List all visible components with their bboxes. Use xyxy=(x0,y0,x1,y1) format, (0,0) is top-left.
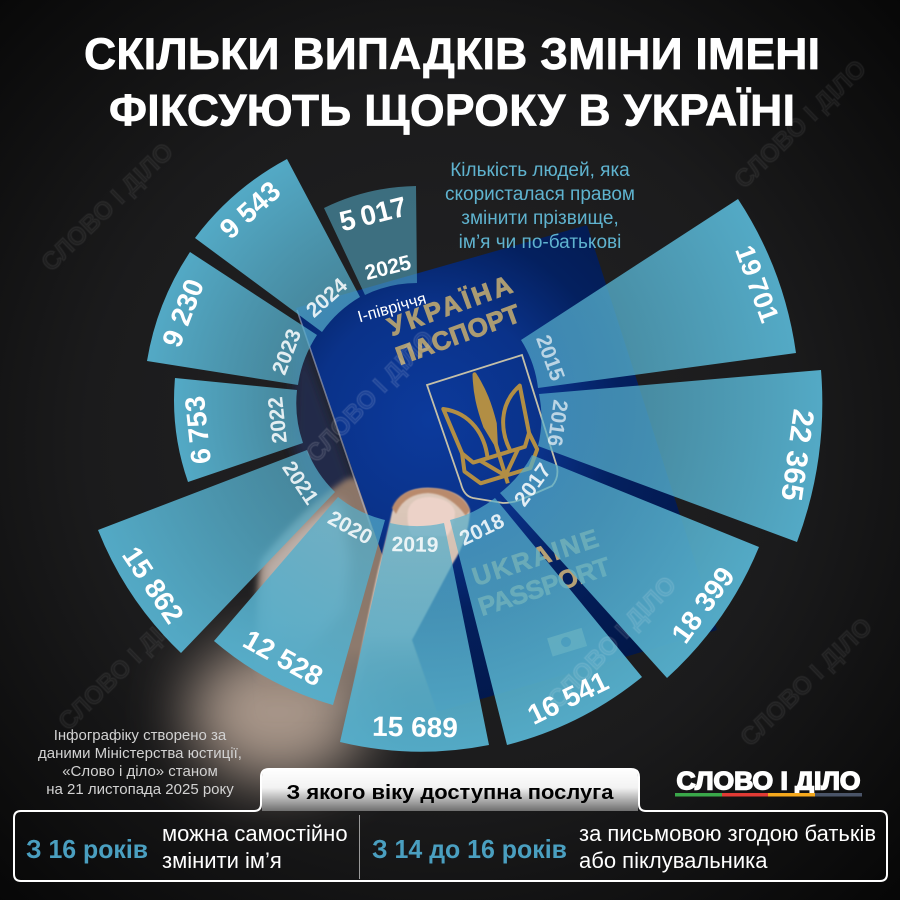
age box xyxy=(14,769,887,881)
wedge 2025 xyxy=(324,186,417,295)
passport cover xyxy=(296,225,717,712)
wedge 2017: 18 399 xyxy=(665,561,741,649)
wedge 2019 xyxy=(340,523,489,752)
tab heading: З якого віку доступна послуга xyxy=(286,782,614,804)
wedge 2021: 15 862 xyxy=(116,541,190,629)
heading: Україна Паспорт: ПАСПОРТ xyxy=(392,298,524,371)
from 14 to 16 years: З 14 до 16 років xyxy=(372,834,567,864)
wedge 2025: 5 017 xyxy=(336,191,410,237)
passport spine line xyxy=(297,310,372,530)
wedge 2024 xyxy=(195,159,360,332)
subtitle xyxy=(445,160,635,253)
wedge 2015 xyxy=(521,199,796,388)
trident xyxy=(436,363,546,495)
divider xyxy=(359,815,360,879)
watermarks: СЛОВО І ДІЛО xyxy=(729,54,872,194)
watermarks: СЛОВО І ДІЛО xyxy=(735,612,878,752)
thumb base shadow xyxy=(392,488,470,516)
title: СКІЛЬКИ ВИПАДКІВ ЗМІНИ ІМЕНІ xyxy=(84,30,820,79)
hand glow xyxy=(188,642,368,782)
source note xyxy=(38,727,242,798)
shadowed inner page left of the spine xyxy=(292,320,372,530)
from 16 description: можна самостійно xyxy=(162,821,348,846)
watermark over chart: СЛОВО І ДІЛО xyxy=(300,325,440,468)
palm highlight xyxy=(262,500,350,680)
watermarks xyxy=(36,54,878,752)
source note: «Слово і діло» станом xyxy=(62,763,218,780)
source note: Інфографіку створено за xyxy=(54,727,227,744)
back-cover text: Ukraine Passport: PASSPORT xyxy=(474,551,614,622)
watermarks: СЛОВО І ДІЛО xyxy=(36,137,179,277)
wedge 2022: 6 753 xyxy=(179,395,217,465)
box outline with tab notch xyxy=(14,769,887,881)
passport xyxy=(296,225,717,712)
back-cover text: Ukraine Passport xyxy=(468,523,614,622)
from 14 description: за письмовою згодою батьків xyxy=(579,821,876,846)
wedge 2024: 2024 xyxy=(302,274,352,322)
wedge 2024: 9 543 xyxy=(214,175,286,245)
wedge 2023: 9 230 xyxy=(156,275,210,351)
thumb nail xyxy=(408,497,455,536)
logo: СЛОВО І ДІЛО xyxy=(676,768,860,796)
wedge 2022 xyxy=(174,378,303,482)
wedge 2020 xyxy=(214,497,385,705)
wedge 2016 xyxy=(538,370,822,542)
wedge 2017 xyxy=(500,455,759,678)
from 16 years: З 16 років xyxy=(26,834,148,864)
source note: даними Міністерства юстиції, xyxy=(38,745,242,762)
watermark over chart: СЛОВО І ДІЛО xyxy=(542,571,682,714)
wedge 2023 xyxy=(147,252,317,385)
wedge 2019: 2019 xyxy=(391,533,439,557)
wedge 2022: 2022 xyxy=(264,396,292,444)
back-cover text: Ukraine Passport: UKRAINE xyxy=(468,523,602,592)
from 16 description: змінити ім’я xyxy=(162,848,282,873)
wedge 2017: 2017 xyxy=(510,459,556,511)
wedge 2015: 2015 xyxy=(531,332,569,384)
tab xyxy=(262,769,638,811)
heading: Україна Паспорт xyxy=(384,269,524,371)
wedge 2023: 2023 xyxy=(268,326,306,378)
title: ФІКСУЮТЬ ЩОРОКУ В УКРАЇНІ xyxy=(109,86,795,136)
wedge 2016: 22 365 xyxy=(774,407,820,503)
wedge 2020: 12 528 xyxy=(238,624,328,692)
wedge 2018 xyxy=(450,498,642,745)
coat of arms shield outline xyxy=(427,355,557,503)
heading: Україна Паспорт: УКРАЇНА xyxy=(384,269,516,342)
wedge 2021: 2021 xyxy=(277,457,323,509)
wedge 2021 xyxy=(98,450,335,653)
wedge 2020: 2020 xyxy=(324,507,376,549)
subtitle: скористалася правом xyxy=(445,184,635,205)
thumb xyxy=(345,488,470,730)
subtitle: змінити прізвище, xyxy=(461,208,619,229)
half-year note: І-півріччя xyxy=(356,290,428,326)
watermark over chart xyxy=(300,325,682,714)
from 14 description: або піклувальника xyxy=(579,848,768,873)
subtitle: ім’я чи по-батькові xyxy=(459,232,621,253)
chip icon xyxy=(547,628,587,657)
from 14 description xyxy=(579,821,876,873)
wedge 2018: 2018 xyxy=(456,509,508,551)
watermarks: СЛОВО І ДІЛО xyxy=(53,596,196,736)
from 16 description xyxy=(162,821,348,873)
subtitle: Кількість людей, яка xyxy=(450,160,630,181)
wedge 2025: 2025 xyxy=(363,251,414,285)
wedge 2019: 15 689 xyxy=(372,711,458,743)
title xyxy=(84,30,820,136)
hand: palm and index finger xyxy=(257,478,392,730)
source note: на 21 листопада 2025 року xyxy=(46,781,234,798)
wedge 2015: 19 701 xyxy=(729,241,785,327)
wedge 2016: 2016 xyxy=(542,398,572,448)
wedge 2018: 16 541 xyxy=(523,665,613,731)
